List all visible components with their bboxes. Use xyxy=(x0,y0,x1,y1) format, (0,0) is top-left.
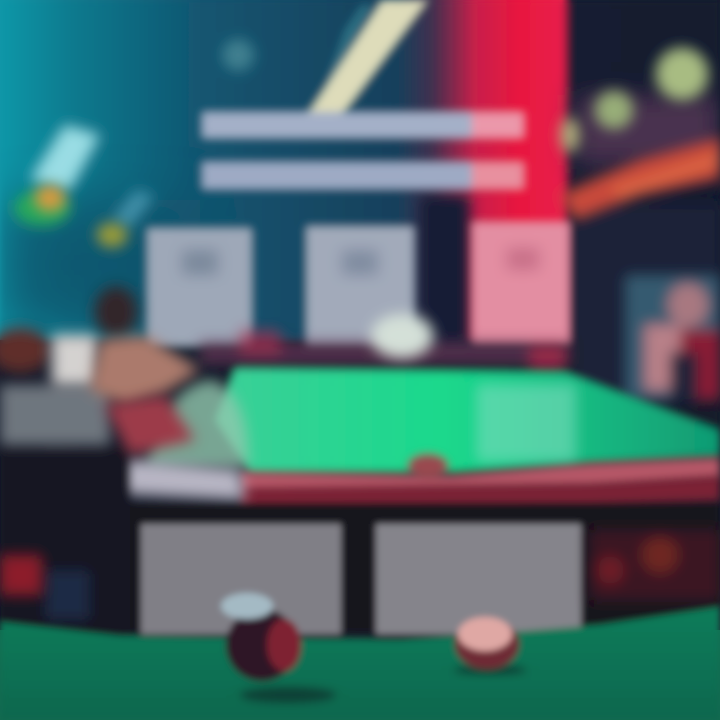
strip under cards xyxy=(200,330,570,370)
panel: card 2 xyxy=(306,226,414,346)
player left xyxy=(0,286,200,635)
icon: chalk cube left xyxy=(14,125,100,226)
icon: chalk cube small xyxy=(97,190,155,247)
icon: cue stick xyxy=(305,0,428,125)
icon: white ball on table xyxy=(371,314,433,358)
icon: floating balls right xyxy=(561,48,708,152)
panel: lower right xyxy=(376,524,581,634)
floor xyxy=(0,607,720,720)
billiard table felt xyxy=(145,368,720,472)
icon: dark ball xyxy=(221,593,336,703)
panel: card 1 xyxy=(147,228,252,346)
panel: card 3 xyxy=(472,222,570,344)
right figure xyxy=(625,275,720,402)
icon: pink ball xyxy=(454,617,526,675)
table rail xyxy=(45,452,720,506)
icon: small faint circle xyxy=(222,39,254,71)
title xyxy=(202,112,524,189)
awning stripe xyxy=(560,138,720,220)
panel: lower left xyxy=(141,524,341,634)
lower right dark red detail xyxy=(590,530,720,600)
table base xyxy=(100,503,720,631)
